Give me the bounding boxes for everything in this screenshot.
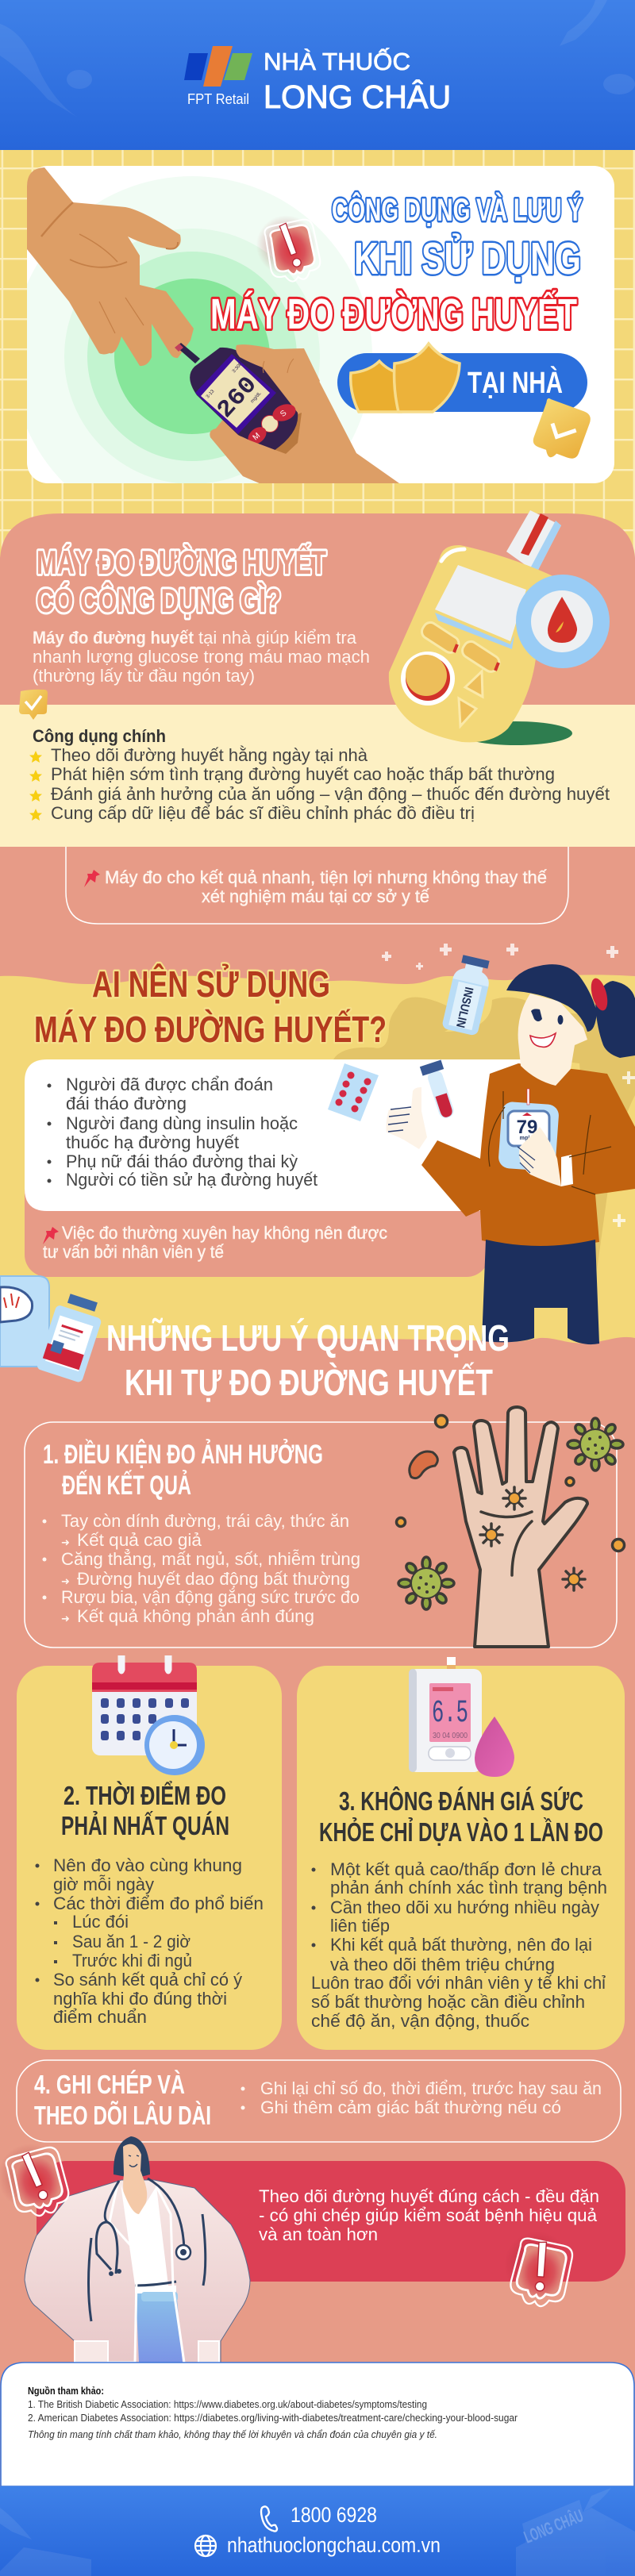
list: note 3: số bất thường hoặc cần điều chỉnh xyxy=(311,1992,585,2012)
panel: red conclusion xyxy=(37,2161,625,2282)
list: note 1 xyxy=(43,1511,360,1626)
icon: alert badge right xyxy=(497,2225,576,2311)
pants xyxy=(482,1240,599,1344)
icon: calendar with clock xyxy=(92,1655,205,1775)
list: main uses: Đánh giá ảnh hưởng của ăn uống – vận động – thuốc đến đường huyết xyxy=(51,784,610,804)
logo text: FPT Retail xyxy=(187,91,249,107)
icon: alert badge xyxy=(251,210,323,287)
list: note 2 xyxy=(35,1855,264,2027)
heading: note 2 xyxy=(61,1781,229,1840)
inner arm shadows xyxy=(89,2214,206,2321)
coat lapels xyxy=(76,2184,184,2363)
note: professional advice xyxy=(43,1223,387,1262)
intro text xyxy=(33,628,370,686)
panel: what is the meter used for xyxy=(19,510,610,924)
decorative map shape xyxy=(333,998,635,1270)
callout: not a replacement: xét nghiệm máu tại cơ sở y tế xyxy=(202,886,429,906)
icon: holding hand and glucose meter: S xyxy=(279,409,289,419)
list: note 3: Cần theo dõi xu hướng nhiều ngày xyxy=(330,1897,599,1917)
buttons xyxy=(419,620,461,656)
decorative plus marks xyxy=(382,944,635,1227)
icon: check badge small xyxy=(19,690,48,720)
list: main uses: Phát hiện sớm tình trạng đường huyết cao hoặc thấp bất thường xyxy=(51,764,555,784)
list: note 2: giờ mỗi ngày xyxy=(53,1874,154,1894)
logo text: NHÀ THUỐC xyxy=(264,47,410,75)
icon: pink meter with drop xyxy=(409,1657,514,1777)
list: main uses xyxy=(29,726,610,823)
list: note 3 xyxy=(311,1859,607,2031)
icon: FPT stripes xyxy=(184,46,252,87)
list: note 2: Sau ăn 1 - 2 giờ xyxy=(72,1932,190,1951)
list: note 3: chế độ ăn, vận động, thuốc xyxy=(311,2011,529,2031)
icon: pink meter with drop: 6.5 xyxy=(432,1696,468,1732)
pill: tại nhà: TẠI NHÀ xyxy=(468,365,563,400)
neck and face xyxy=(518,994,587,1086)
list: note 1: Đường huyết dao động bất thường xyxy=(77,1569,350,1589)
heading: CÓ CÔNG DỤNG GÌ? xyxy=(37,581,281,619)
list: who should use: Phụ nữ đái tháo đường thai kỳ xyxy=(66,1152,298,1171)
conclusion text: Theo dõi đường huyết đúng cách - đều đặn xyxy=(259,2186,599,2206)
references text: 1. The British Diabetic Association: https://www.diabetes.org.uk/about-diabetes/symptoms/testing xyxy=(28,2399,427,2410)
list: main uses: Cung cấp dữ liệu để bác sĩ điều chỉnh phác đồ điều trị xyxy=(51,803,475,823)
conclusion text: - có ghi chép giúp kiểm soát bệnh hiệu quả xyxy=(259,2205,598,2225)
list: note 3: Một kết quả cao/thấp đơn lẻ chưa xyxy=(330,1859,602,1879)
illustration: hand with germs xyxy=(397,1407,624,1647)
handheld meter xyxy=(498,1102,560,1171)
panel: hero card xyxy=(27,166,614,483)
list: note 4: Ghi lại chỉ số đo, thời điểm, trước hay sau ăn xyxy=(260,2078,602,2098)
icon: insulin vial xyxy=(441,954,494,1036)
hero title xyxy=(210,191,583,338)
intro text: Máy đo đường huyết xyxy=(33,628,194,648)
ponytail xyxy=(595,981,635,1058)
intro text: tại nhà giúp kiểm tra xyxy=(198,628,357,648)
heading xyxy=(34,963,387,1050)
panel: note 1 xyxy=(25,1407,624,1647)
icon: phone xyxy=(261,2506,277,2532)
text: phone number: 1800 6928 xyxy=(291,2503,377,2527)
heading: note 1 xyxy=(43,1440,323,1501)
heading: note 1: ĐẾN KẾT QUẢ xyxy=(62,1471,191,1501)
list: note 3: Khi kết quả bất thường, nên đo lại xyxy=(330,1935,592,1955)
holding hand and cuff xyxy=(519,1127,561,1186)
list: who should use: Người có tiền sử hạ đường huyết xyxy=(66,1170,318,1190)
heading: note 4 xyxy=(34,2070,211,2130)
list: who should use: Người đã được chẩn đoán xyxy=(66,1075,273,1094)
figure: woman with meter: mg/dl xyxy=(520,1136,534,1141)
list: note 2: Trước khi đi ngủ xyxy=(72,1951,192,1970)
heading: note 4: THEO DÕI LÂU DÀI xyxy=(34,2101,211,2130)
figure: doctor xyxy=(25,2136,250,2363)
references text: 2. American Diabetes Association: https://diabetes.org/living-with-diabetes/treatment-care/checking-your-blood-sugar xyxy=(28,2413,518,2424)
heading: note 1: 1. ĐIỀU KIỆN ĐO ẢNH HƯỞNG xyxy=(43,1440,323,1470)
text: website: nhathuoclongchau.com.vn xyxy=(227,2533,441,2557)
note: professional advice: tư vấn bởi nhân viên y tế xyxy=(43,1242,224,1262)
figure: woman with meter: 79 xyxy=(517,1117,537,1138)
callout: not a replacement: Máy đo cho kết quả nhanh, tiện lợi nhưng không thay thế xyxy=(105,867,547,887)
list: main uses: Công dụng chính xyxy=(33,726,166,746)
figure: woman with meter xyxy=(421,964,635,1344)
list: note 2: Lúc đói xyxy=(72,1912,129,1932)
list: note 1: ➜ xyxy=(61,1575,70,1587)
panel: yellow wave section xyxy=(0,975,635,1344)
list: note 4 xyxy=(241,2078,602,2117)
panel: note 2 xyxy=(17,1655,282,2050)
icon: thumbs-up hand xyxy=(386,1087,427,1149)
heading: note 4: 4. GHI CHÉP VÀ xyxy=(34,2070,185,2099)
list: main uses: Theo dõi đường huyết hằng ngày tại nhà xyxy=(51,745,368,765)
references text xyxy=(28,2385,518,2440)
callout: not a replacement xyxy=(66,847,568,924)
list: who should use: thuốc hạ đường huyết xyxy=(66,1132,239,1152)
logo xyxy=(184,46,451,115)
icon: holding hand and glucose meter: 3:30PM xyxy=(232,359,246,374)
heading: important notes: NHỮNG LƯU Ý QUAN TRỌNG xyxy=(106,1317,510,1359)
list: note 3: Luôn trao đổi với nhân viên y tế khi chỉ xyxy=(311,1973,606,1993)
list: note 1: Căng thẳng, mất ngủ, sốt, nhiễm trùng xyxy=(61,1549,360,1569)
footer building decoration xyxy=(0,2486,635,2576)
list: who should use: Người đang dùng insulin hoặc xyxy=(66,1113,298,1133)
heading: note 2: PHẢI NHẤT QUÁN xyxy=(61,1811,229,1840)
panel: references xyxy=(1,2363,634,2486)
conclusion text xyxy=(259,2186,599,2244)
panel: note 4 xyxy=(17,2060,621,2142)
drop badge xyxy=(516,575,610,668)
face and neck xyxy=(123,2144,147,2214)
panel: cautions section xyxy=(0,1276,625,2363)
meter reading: 260 xyxy=(212,371,264,424)
illustration: yellow glucose meter xyxy=(389,510,610,745)
list: note 3: liên tiếp xyxy=(330,1916,390,1936)
list: note 4: Ghi thêm cảm giác bất thường nếu có xyxy=(260,2097,561,2117)
heading: MÁY ĐO ĐƯỜNG HUYẾT? xyxy=(34,1009,387,1050)
icon: alert badge left xyxy=(0,2136,72,2224)
list: note 1: Kết quả không phản ánh đúng xyxy=(77,1606,314,1626)
icon: insulin vial: INSULIN xyxy=(453,986,475,1029)
list: note 2: Nên đo vào cùng khung xyxy=(53,1855,242,1875)
footer band xyxy=(0,2486,635,2576)
logo text: LONG CHÂU xyxy=(264,79,451,115)
heading xyxy=(37,543,326,619)
icon: pink meter with drop: 30 04 0900 xyxy=(433,1732,468,1740)
panel: salmon section xyxy=(0,513,635,2381)
list: note 2: Các thời điểm đo phổ biến xyxy=(53,1894,264,1913)
icon: holding hand and glucose meter: mg/dL xyxy=(250,390,263,404)
list: note 1: ➜ xyxy=(61,1613,70,1624)
panel: who should use xyxy=(25,944,635,1344)
icon: holding hand and glucose meter: 3-13 xyxy=(206,389,216,399)
icon: scale xyxy=(0,1276,49,1367)
note: professional advice: Việc đo thường xuyên hay không nên được xyxy=(62,1223,387,1243)
conclusion text: và an toàn hơn xyxy=(259,2224,378,2244)
heading: important notes xyxy=(106,1317,510,1403)
list: note 1: ➜ xyxy=(61,1536,70,1548)
icon: pill blister xyxy=(328,1063,379,1121)
heading: note 3 xyxy=(319,1786,603,1847)
icon: test tube xyxy=(420,1060,459,1121)
icon: holding hand and glucose meter xyxy=(175,343,399,483)
references text: Thông tin mang tính chất tham khảo, không thay thế lời khuyên và chẩn đoán của chuyên gia y tế. xyxy=(28,2429,437,2440)
cream band xyxy=(0,705,635,847)
list: note 2: nghĩa khi đo đúng thời xyxy=(53,1989,227,2009)
logo text xyxy=(187,47,451,115)
salmon note box xyxy=(25,1059,489,1277)
references text: Nguồn tham khảo: xyxy=(28,2385,104,2397)
intro text: nhanh lượng glucose trong máu mao mạch xyxy=(33,647,370,667)
icon: check badge xyxy=(529,398,593,466)
list: note 3: phản ánh chính xác tình trạng bệnh xyxy=(330,1878,607,1897)
panel: note 3 xyxy=(297,1657,625,2050)
green concentric circles xyxy=(27,176,372,483)
list: who should use xyxy=(48,1075,318,1190)
icon: upper hand xyxy=(27,167,194,366)
heading: note 2: 2. THỜI ĐIỂM ĐO xyxy=(64,1781,226,1810)
icon: sample jar with card xyxy=(36,1290,106,1383)
hair xyxy=(506,964,597,1032)
hair xyxy=(114,2136,150,2178)
heading: important notes: KHI TỰ ĐO ĐƯỜNG HUYẾT xyxy=(125,1362,493,1403)
list: who should use: đái tháo đường xyxy=(66,1094,187,1113)
list: note 1: Rượu bia, vận động gắng sức trước đo xyxy=(61,1587,360,1607)
list: note 1: Kết quả cao giả xyxy=(77,1530,202,1550)
yellow grid background xyxy=(0,150,635,563)
icon: globe xyxy=(195,2536,216,2556)
meter body xyxy=(190,348,298,451)
intro text: (thường lấy từ đầu ngón tay) xyxy=(33,666,255,686)
shirt and pants xyxy=(121,2184,168,2286)
pill: tại nhà xyxy=(337,344,587,412)
stethoscope xyxy=(96,2178,184,2274)
list: note 2: điểm chuẩn xyxy=(53,2007,147,2027)
icon: holding hand and glucose meter: M xyxy=(252,431,262,442)
list: note 1: Tay còn dính đường, trái cây, thức ăn xyxy=(61,1511,349,1531)
heading: MÁY ĐO ĐƯỜNG HUYẾT xyxy=(37,543,326,581)
bean cell xyxy=(410,1451,437,1478)
list: note 2: So sánh kết quả chỉ có ý xyxy=(53,1970,242,1990)
fingers over meter xyxy=(236,344,320,401)
test strip xyxy=(176,343,200,363)
header band xyxy=(0,0,635,150)
sweater xyxy=(421,1063,635,1247)
heading: AI NÊN SỬ DỤNG xyxy=(92,963,330,1005)
meter buttons xyxy=(262,416,278,432)
list: note 3: và theo dõi thêm triệu chứng xyxy=(330,1955,555,1974)
white list box xyxy=(25,1059,543,1211)
icon: shields xyxy=(351,344,460,412)
footer store sign: LONG CHÂU xyxy=(521,2505,586,2547)
